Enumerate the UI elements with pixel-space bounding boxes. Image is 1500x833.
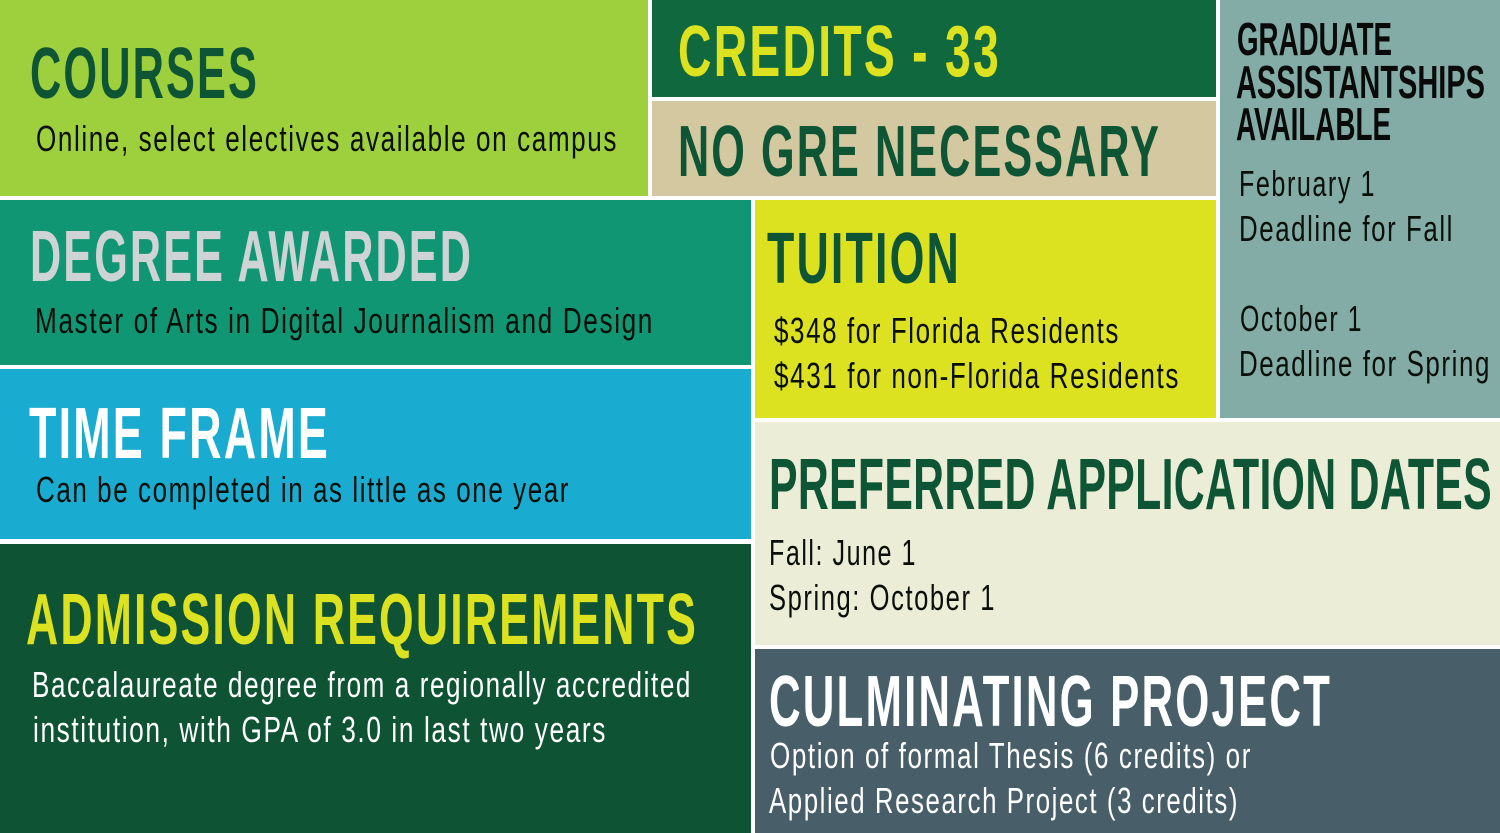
- heading: no GRE necessary: NO GRE NECESSARY: [678, 112, 1161, 192]
- panel: preferred application dates: [755, 422, 1500, 645]
- text: degree detail: Master of Arts in Digital Journalism and Design: [35, 300, 654, 341]
- heading: graduate assistantships: [1236, 13, 1485, 150]
- panel: graduate assistantships: [1220, 0, 1500, 418]
- text: admission detail: Baccalaureate degree from a regionally accredited: [32, 664, 692, 705]
- panel: degree awarded: [0, 200, 751, 365]
- heading: tuition: TUITION: [767, 219, 961, 299]
- text: culminating detail: Option of formal Thesis (6 credits) or: [770, 735, 1252, 776]
- text: time frame detail: Can be completed in as little as one year: [36, 469, 570, 510]
- text: application dates: Fall: June 1: [769, 532, 917, 573]
- panel: admission requirements: [0, 544, 751, 833]
- heading: graduate assistantships: GRADUATE: [1237, 13, 1392, 65]
- text: tuition rates: $431 for non-Florida Residents: [774, 355, 1180, 396]
- text: assistantship deadlines: February 1: [1239, 163, 1376, 204]
- text: application dates: [769, 532, 996, 618]
- panel: no GRE: [652, 101, 1216, 196]
- heading: time frame: TIME FRAME: [29, 394, 330, 474]
- text: culminating detail: Applied Research Project (3 credits): [769, 780, 1239, 821]
- panel: culminating project: [755, 649, 1500, 833]
- text: admission detail: [32, 664, 692, 750]
- heading: courses: COURSES: [30, 34, 259, 114]
- text: courses detail: Online, select electives available on campus: [36, 118, 618, 159]
- heading: credits: CREDITS - 33: [678, 12, 1001, 92]
- text: admission detail: institution, with GPA of 3.0 in last two years: [33, 709, 607, 750]
- text: culminating detail: [769, 735, 1252, 821]
- panel: credits: [652, 0, 1216, 97]
- text: tuition rates: [774, 310, 1180, 396]
- panel: tuition: [755, 200, 1216, 418]
- text: tuition rates: $348 for Florida Residents: [774, 310, 1120, 351]
- text: application dates: Spring: October 1: [769, 577, 996, 618]
- panel: courses: [0, 0, 648, 196]
- text: assistantship deadlines: October 1: [1240, 298, 1363, 339]
- heading: graduate assistantships: AVAILABLE: [1236, 98, 1391, 150]
- panel: time frame: [0, 369, 751, 539]
- text: assistantship deadlines: [1239, 163, 1491, 384]
- heading: admission requirements: ADMISSION REQUIREMENTS: [26, 580, 698, 660]
- heading: degree awarded: DEGREE AWARDED: [30, 217, 473, 297]
